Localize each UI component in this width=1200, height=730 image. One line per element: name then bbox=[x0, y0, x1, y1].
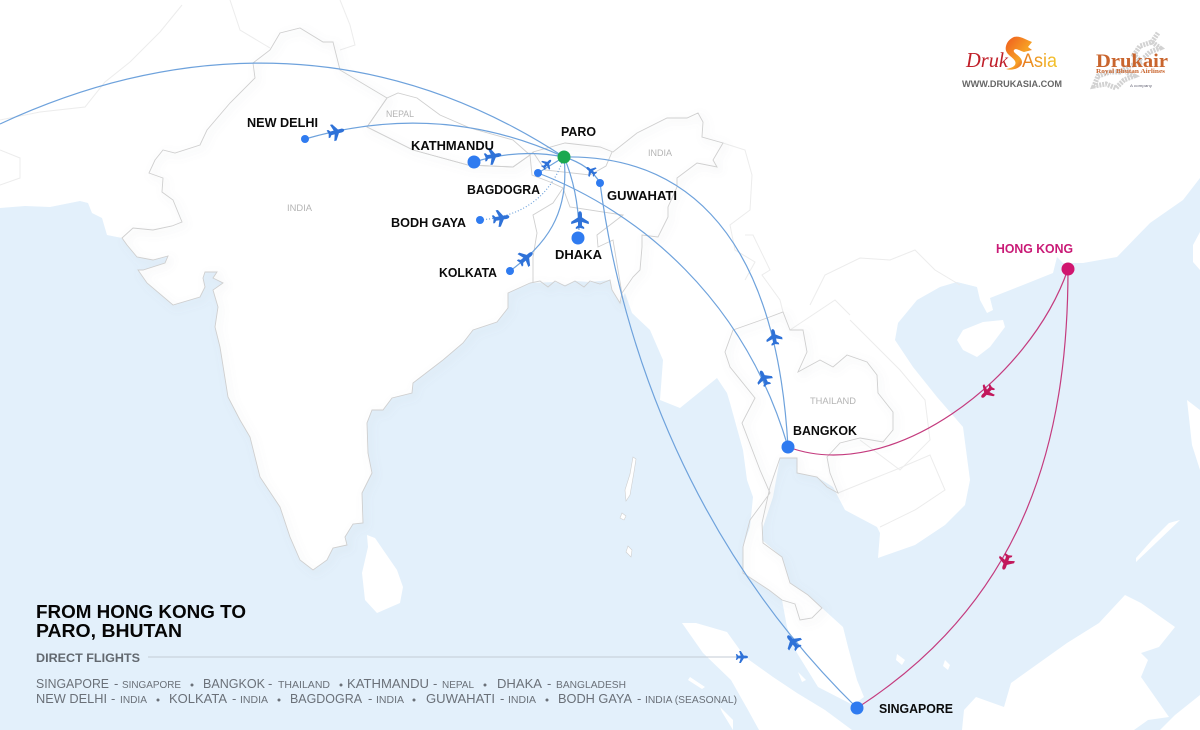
logo: Druk Asia: Druk bbox=[965, 48, 1009, 72]
city labels: DHAKA bbox=[555, 247, 603, 262]
country: Bangladesh and Bhutan borders bbox=[530, 152, 623, 300]
destinations list: line 2: INDIA bbox=[120, 695, 147, 706]
destinations list: line 2: - bbox=[232, 691, 236, 706]
country labels: INDIA bbox=[287, 203, 312, 213]
island: Sulawesi bbox=[1160, 695, 1200, 730]
country: India outline bbox=[122, 28, 723, 570]
flight routes: blue bbox=[0, 63, 857, 708]
destinations list: line 1: KATHMANDU bbox=[347, 676, 429, 691]
destinations list: line 2: - bbox=[637, 691, 641, 706]
destinations list: line 2: BODH GAYA bbox=[558, 691, 632, 706]
city labels: HONG KONG bbox=[996, 241, 1073, 256]
island: Luzon bbox=[1187, 400, 1200, 470]
destinations list: line 1: - bbox=[547, 676, 551, 691]
destinations list: line 1: DHAKA bbox=[497, 676, 542, 691]
destinations list: line 2: NEW DELHI bbox=[36, 691, 107, 706]
logo: Drukair: A company bbox=[1130, 83, 1152, 88]
logo: Drukair bbox=[1094, 33, 1169, 88]
country: Thailand outline bbox=[725, 312, 893, 620]
destinations list: line 1 bbox=[36, 676, 626, 691]
city labels: SINGAPORE bbox=[879, 701, 953, 716]
destinations list: line 1: SINGAPORE bbox=[122, 680, 181, 691]
island: Hainan bbox=[957, 320, 1005, 357]
city labels: GUWAHATI bbox=[607, 188, 677, 203]
island: Palawan bbox=[1136, 520, 1180, 562]
logo: Drukair: Royal Bhutan Airlines bbox=[1096, 68, 1166, 75]
plane icons bbox=[326, 122, 805, 654]
destinations list: line 2: INDIA bbox=[508, 695, 536, 706]
title bbox=[36, 602, 246, 641]
icon: dragon S bbox=[1006, 37, 1032, 70]
destinations list: line 2: INDIA (SEASONAL) bbox=[645, 695, 737, 706]
destinations list: line 2: INDIA bbox=[240, 695, 268, 706]
city markers bbox=[301, 135, 864, 714]
destinations list: line 2: - bbox=[368, 691, 372, 706]
destinations list: line 2: - bbox=[111, 691, 115, 706]
icon: grey dragon bbox=[1094, 33, 1160, 88]
country: Nepal outline bbox=[367, 93, 530, 167]
city labels: KOLKATA bbox=[439, 265, 498, 280]
destinations list: line 2: - bbox=[500, 691, 504, 706]
marker: Hong Kong bbox=[1062, 262, 1074, 276]
destinations list: line 2: GUWAHATI bbox=[426, 691, 495, 706]
city labels: BODH GAYA bbox=[391, 215, 467, 230]
destinations list: line 1: NEPAL bbox=[442, 680, 474, 691]
destinations list: line 2: INDIA bbox=[376, 695, 404, 706]
destinations list: line 1: - bbox=[268, 676, 272, 691]
logo: Druk Asia: Asia bbox=[1022, 51, 1057, 72]
destinations list: line 2 bbox=[36, 691, 737, 706]
title: PARO, BHUTAN bbox=[36, 621, 182, 641]
logo: Drukair: Drukair bbox=[1096, 51, 1169, 72]
plane icons: pink bbox=[976, 381, 1016, 572]
islands: small Indonesian islets bbox=[688, 654, 950, 730]
island: Borneo bbox=[962, 595, 1175, 730]
direct flights arrow bbox=[148, 651, 748, 663]
destinations list: line 1: THAILAND bbox=[278, 680, 330, 691]
destinations list: line 2: KOLKATA bbox=[169, 691, 227, 706]
marker: Paro bbox=[558, 150, 570, 164]
country labels: INDIA bbox=[648, 148, 672, 158]
island: Sumatra bbox=[682, 623, 852, 730]
destinations list: line 2: BAGDOGRA bbox=[290, 691, 362, 706]
city labels: PARO bbox=[561, 124, 596, 139]
direct flights heading: DIRECT FLIGHTS bbox=[36, 653, 140, 665]
destinations list: line 1: SINGAPORE bbox=[36, 676, 109, 691]
city labels bbox=[247, 115, 1073, 716]
map: light neighbouring borders bbox=[0, 0, 960, 527]
flight routes: pink bbox=[788, 269, 1068, 708]
country labels: NEPAL bbox=[386, 109, 414, 119]
island: Sri Lanka bbox=[362, 535, 403, 613]
city labels: NEW DELHI bbox=[247, 115, 318, 130]
destinations list: line 1: BANGLADESH bbox=[556, 680, 626, 691]
country labels: THAILAND bbox=[810, 396, 857, 406]
destinations list: line 1: - bbox=[114, 676, 118, 691]
destinations list: line 1: BANGKOK bbox=[203, 676, 265, 691]
island: Taiwan bbox=[1193, 232, 1200, 270]
logo: Druk Asia bbox=[965, 37, 1057, 72]
country labels bbox=[287, 109, 857, 406]
title: FROM HONG KONG TO bbox=[36, 602, 246, 622]
destinations list: line 1: - bbox=[433, 676, 437, 691]
city labels: BANGKOK bbox=[793, 423, 858, 438]
islands: Andaman and Nicobar bbox=[620, 457, 636, 557]
city labels: BAGDOGRA bbox=[467, 182, 541, 197]
city labels: KATHMANDU bbox=[411, 138, 494, 153]
website address: WWW.DRUKASIA.COM bbox=[962, 79, 1062, 89]
